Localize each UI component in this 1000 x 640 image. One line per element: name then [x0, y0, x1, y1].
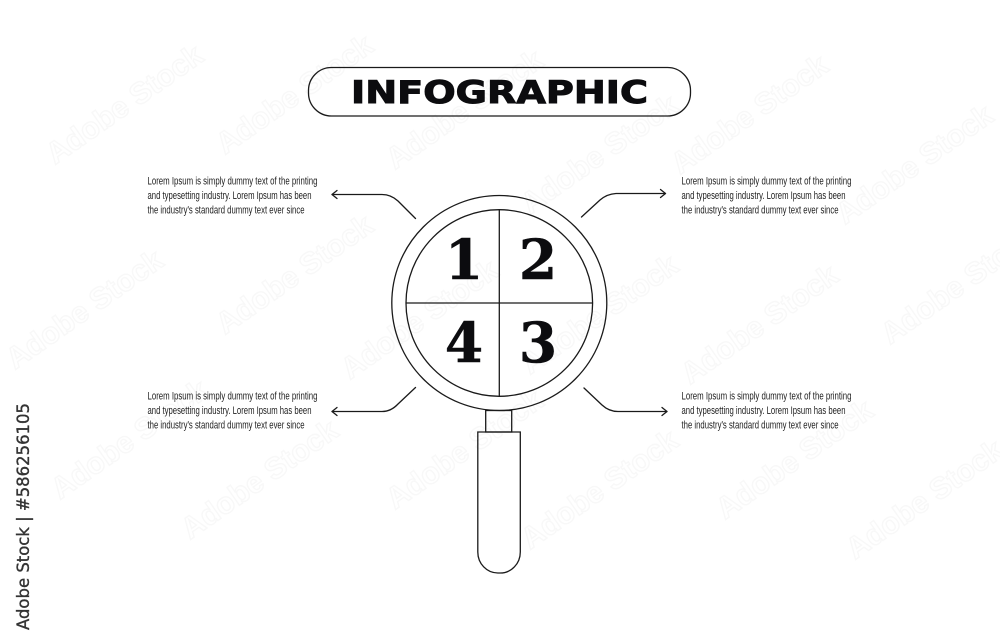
lens divider: horizontal	[406, 302, 593, 304]
inner lens	[406, 210, 593, 396]
text: Adobe Stock	[175, 413, 344, 546]
number 3: 3	[519, 310, 557, 375]
text block: bottom left: the industry's standard dummy text ever since	[148, 420, 304, 432]
magnifying glass	[392, 196, 607, 573]
text: Adobe Stock	[830, 98, 999, 231]
handle grip	[478, 432, 520, 573]
title: INFOGRAPHIC	[351, 75, 648, 111]
text: Adobe Stock	[0, 243, 169, 376]
arrow: top right	[582, 190, 666, 217]
text block: bottom right: the industry's standard dummy text ever since	[682, 420, 838, 432]
text block: bottom right	[682, 390, 852, 432]
number 2: 2	[519, 227, 557, 292]
outer lens ring	[392, 196, 607, 410]
text block: bottom right: Lorem Ipsum is simply dummy text of the printing	[682, 390, 852, 402]
text: Adobe Stock	[210, 208, 379, 341]
text block: top left: and typesetting industry. Lorem Ipsum has been	[148, 190, 312, 202]
text block: bottom left: and typesetting industry. Lorem Ipsum has been	[148, 405, 312, 417]
text block: bottom right: and typesetting industry. Lorem Ipsum has been	[682, 405, 846, 417]
text: Adobe Stock	[380, 383, 549, 516]
text: Adobe Stock	[710, 393, 879, 526]
text: Adobe Stock	[210, 28, 379, 161]
number 1: 1	[445, 227, 483, 292]
text: Adobe Stock	[515, 423, 684, 556]
text block: bottom left: Lorem Ipsum is simply dummy text of the printing	[148, 390, 318, 402]
text block: top left: Lorem Ipsum is simply dummy text of the printing	[148, 176, 318, 188]
text: Adobe Stock	[515, 248, 684, 381]
number 4: 4	[445, 310, 483, 375]
text: Adobe Stock	[380, 43, 549, 176]
text block: top right	[682, 176, 852, 216]
stock id label: Adobe Stock | #586256105	[14, 403, 34, 630]
text: Adobe Stock	[665, 48, 834, 181]
text block: top left	[148, 176, 318, 216]
lens divider: vertical	[498, 210, 500, 396]
arrow: top left	[332, 190, 416, 218]
arrow: bottom right	[584, 388, 667, 416]
text: Adobe Stock	[675, 258, 844, 391]
text: Adobe Stock	[45, 373, 214, 506]
text block: top right: and typesetting industry. Lorem Ipsum has been	[682, 190, 846, 202]
text block: top right: the industry's standard dummy text ever since	[682, 204, 838, 216]
text block: top left: the industry's standard dummy text ever since	[148, 204, 304, 216]
text: Adobe Stock	[40, 38, 209, 171]
arrow: bottom left	[332, 388, 416, 416]
text: Adobe Stock	[335, 253, 504, 386]
title	[308, 68, 690, 116]
text: Adobe Stock	[515, 88, 684, 221]
text block: bottom left	[148, 390, 318, 432]
text block: top right: Lorem Ipsum is simply dummy text of the printing	[682, 176, 852, 188]
handle neck	[486, 410, 512, 432]
